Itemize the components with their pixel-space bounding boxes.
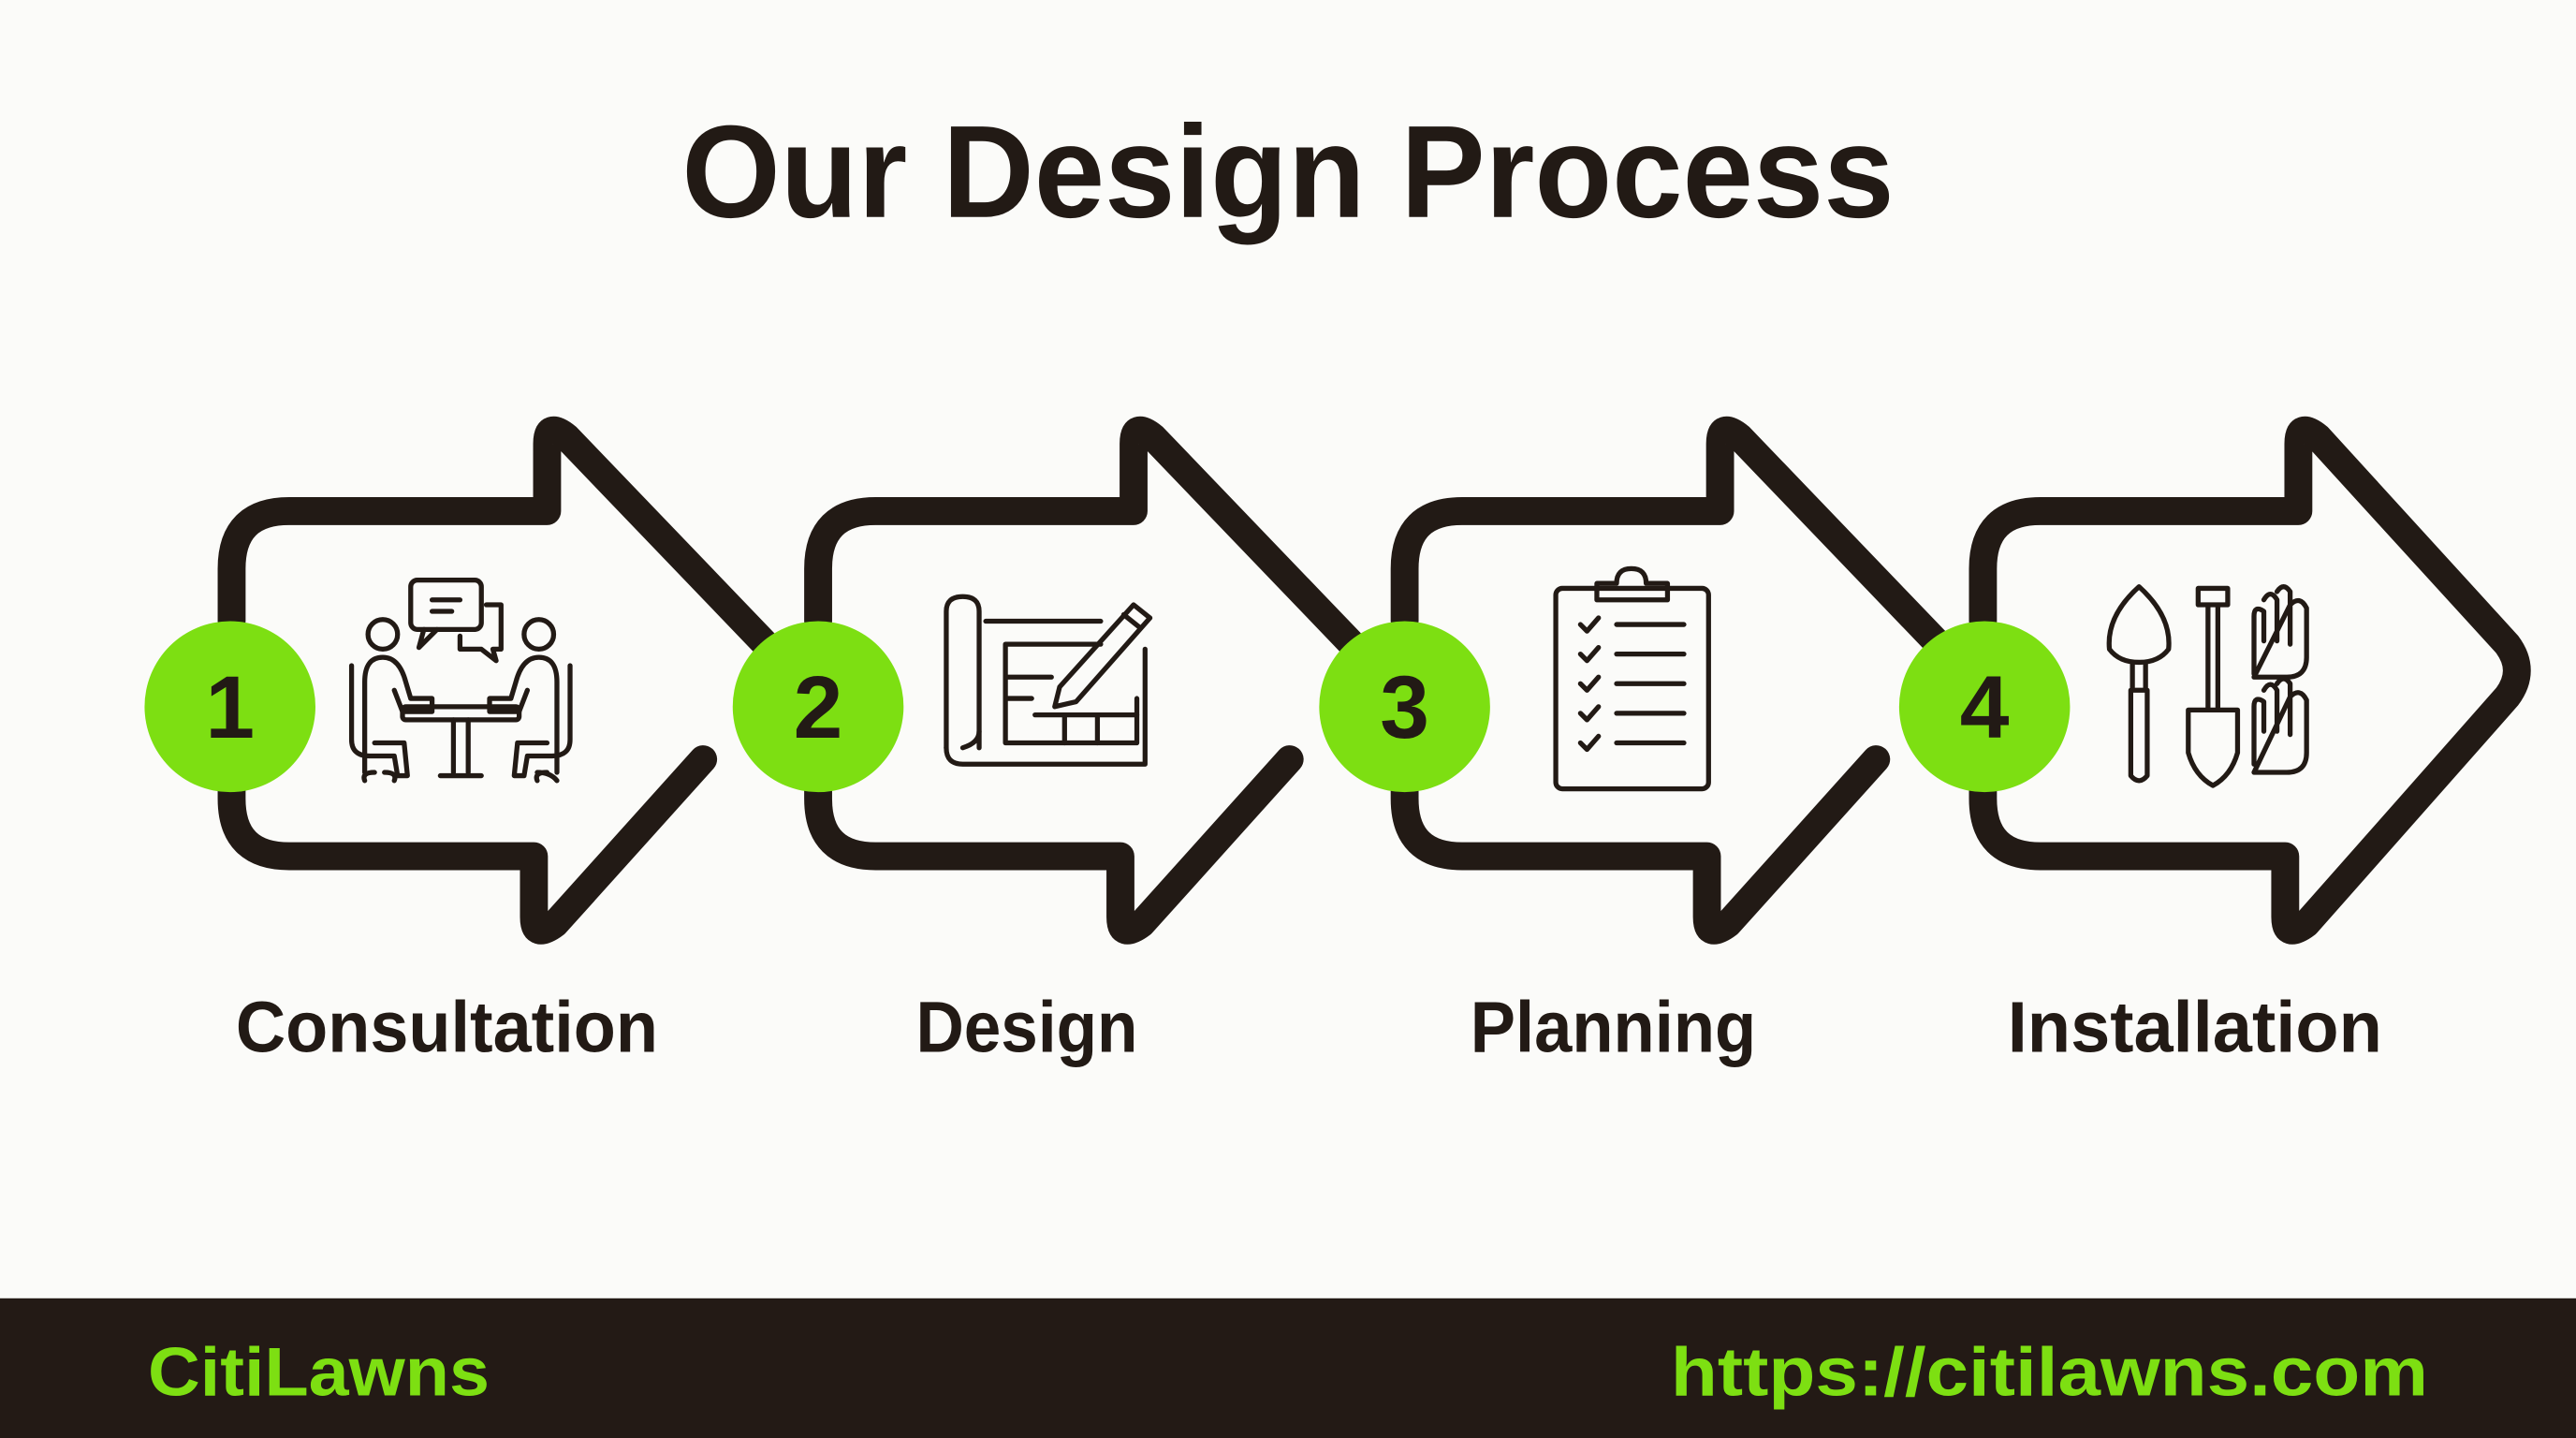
- label: Design: Design: [915, 987, 1137, 1067]
- label: Installation: Installation: [2008, 987, 2382, 1067]
- icon: consultation meeting: [352, 580, 570, 781]
- step 2 badge: 2: [794, 658, 842, 757]
- title: Our Design Process: [681, 98, 1895, 245]
- footer brand: CitiLawns: [148, 1332, 490, 1410]
- icon: checklist clipboard: [1556, 568, 1708, 789]
- icon: garden tools: [2109, 587, 2306, 785]
- icon: blueprint with pencil: [946, 596, 1150, 764]
- step 4 badge: [1899, 622, 2070, 792]
- arrow 1: [231, 431, 766, 931]
- label: Consultation: Consultation: [236, 987, 658, 1067]
- step 3 badge: [1319, 622, 1490, 792]
- arrow 2: [818, 431, 1352, 931]
- footer bar: [0, 1299, 2576, 1438]
- step 1 badge: [144, 622, 315, 792]
- step 1 badge: 1: [205, 658, 255, 757]
- arrow 3: [1405, 431, 1939, 931]
- step 2 badge: [733, 622, 903, 792]
- step 4 badge: 4: [1960, 658, 2010, 757]
- footer url: https://citilawns.com: [1671, 1332, 2428, 1410]
- label: Planning: Planning: [1471, 987, 1756, 1067]
- step 3 badge: 3: [1380, 658, 1429, 757]
- arrow 4: [1983, 431, 2517, 931]
